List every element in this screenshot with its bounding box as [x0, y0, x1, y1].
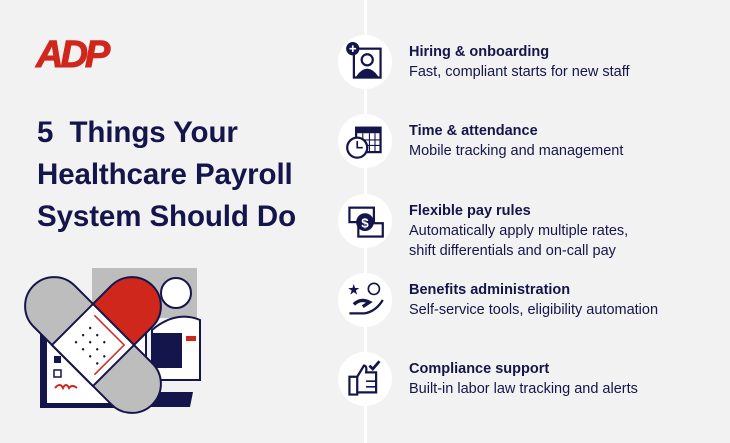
icon: pay [338, 194, 392, 248]
icon: benefits: ★ [347, 282, 360, 298]
title: Healthcare Payroll [37, 158, 293, 191]
item: hiring: Fast, compliant starts for new staff [409, 64, 630, 80]
item: hiring: Hiring & onboarding [409, 44, 549, 60]
title [37, 116, 296, 233]
item: benefits [409, 282, 658, 318]
illustration: healthcare bandage [24, 268, 201, 414]
item: time: Mobile tracking and management [409, 143, 623, 159]
item: pay: Automatically apply multiple rates, [409, 223, 628, 239]
vertical divider line [364, 0, 367, 443]
item: benefits: Benefits administration [409, 282, 570, 298]
item: pay [409, 203, 628, 259]
item: compliance: Built-in labor law tracking and alerts [409, 381, 638, 397]
icon: time [338, 114, 392, 168]
item: benefits: Self-service tools, eligibility automation [409, 302, 658, 318]
item: time [409, 123, 624, 159]
icon: compliance [338, 352, 392, 406]
item: pay: shift differentials and on-call pay [409, 243, 616, 259]
logo: ADP: ADP [36, 34, 107, 76]
icon: pay: $ [361, 216, 369, 231]
title: 5 Things Your [37, 116, 238, 149]
icon: benefits [338, 273, 392, 327]
item: compliance: Compliance support [409, 361, 549, 377]
item: hiring [409, 44, 630, 80]
icon: hiring [338, 35, 392, 89]
item: compliance [409, 361, 638, 397]
item: time: Time & attendance [409, 123, 538, 139]
title: System Should Do [37, 200, 296, 233]
item: pay: Flexible pay rules [409, 203, 531, 219]
